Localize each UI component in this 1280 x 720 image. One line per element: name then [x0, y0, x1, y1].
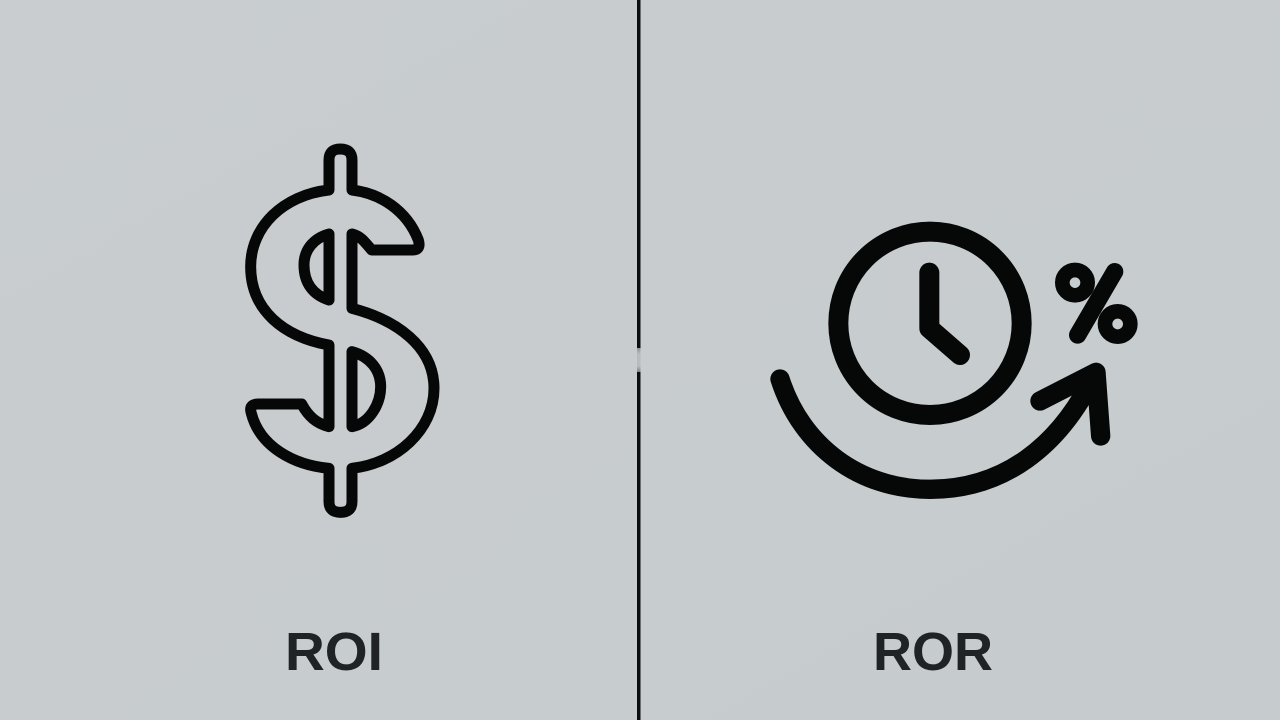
icon: dollar sign [251, 149, 434, 512]
panel: ROI [251, 149, 434, 682]
icon: clock with growth arrow and percent [780, 232, 1130, 489]
panel: ROR [780, 232, 1130, 682]
clock hands [929, 273, 960, 355]
percent sign [1062, 270, 1130, 337]
label: ROR: ROR [873, 622, 993, 682]
curved arrow [780, 372, 1101, 489]
label: ROI: ROI [285, 622, 383, 682]
clock face [838, 232, 1022, 415]
divider [637, 0, 640, 720]
